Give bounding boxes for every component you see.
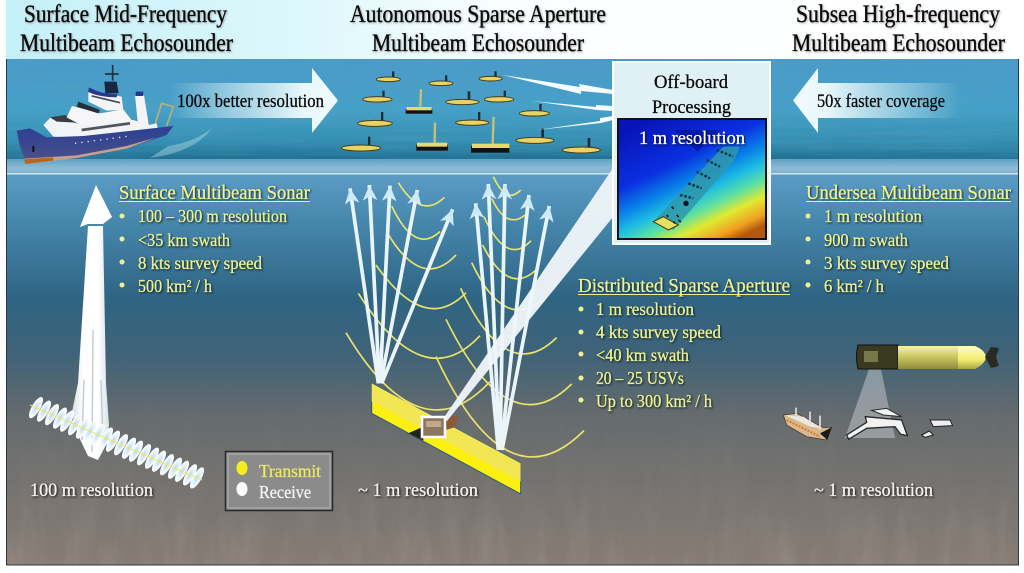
resolution label: 1 m resolution bbox=[639, 128, 745, 149]
legend bbox=[226, 452, 332, 510]
small ship inside swath bbox=[408, 416, 458, 441]
text block: surface multibeam sonar: 500 km² / h bbox=[138, 276, 212, 296]
icon: underwater vehicle bbox=[856, 345, 999, 369]
text block: surface multibeam sonar: 100 – 300 m resolution bbox=[138, 206, 287, 226]
sea surface bbox=[6, 59, 1019, 160]
text block: surface multibeam sonar: 8 kts survey speed bbox=[138, 253, 262, 273]
receive beam arrows bbox=[350, 184, 549, 450]
transmit key: Transmit bbox=[259, 461, 321, 481]
heading: Processing bbox=[652, 97, 731, 118]
title: autonomous echosounder bbox=[350, 1, 606, 57]
inset marker on ship bbox=[422, 417, 445, 437]
arrow: 100x better resolution bbox=[170, 68, 338, 133]
title: autonomous echosounder: Autonomous Sparse Aperture bbox=[350, 1, 606, 28]
sky band bbox=[6, 0, 1019, 59]
icon: debris bbox=[922, 420, 953, 437]
panel: off-board processing bbox=[613, 62, 770, 244]
link wedge to off-board processing bbox=[443, 168, 613, 421]
text block: distributed sparse aperture: 4 kts survey speed bbox=[596, 322, 721, 342]
text block: surface multibeam sonar: Surface Multibeam Sonar bbox=[119, 182, 310, 204]
seabed texture bbox=[8, 533, 948, 564]
text block: undersea multibeam sonar: 900 m swath bbox=[824, 230, 908, 250]
text block: distributed sparse aperture: Up to 300 km² / h bbox=[596, 391, 712, 411]
text block: surface multibeam sonar: <35 km swath bbox=[138, 230, 230, 250]
wreck bbox=[653, 130, 740, 230]
arrow: 100x better resolution: 100x better resolution bbox=[177, 91, 324, 112]
bathymetry image bbox=[618, 119, 766, 239]
title: autonomous echosounder: Multibeam Echosounder bbox=[372, 30, 585, 57]
text block: distributed sparse aperture: 1 m resolution bbox=[596, 299, 694, 319]
text block: distributed sparse aperture: 20 – 25 USVs bbox=[596, 368, 684, 388]
data links from vessels to processing bbox=[503, 75, 613, 130]
icon: sonar image of wreck bbox=[847, 408, 907, 439]
icon: survey ship bbox=[17, 65, 173, 164]
heading: Off-board bbox=[654, 72, 728, 93]
text block: undersea multibeam sonar bbox=[806, 182, 1011, 296]
arrow: 50x faster coverage bbox=[793, 68, 960, 133]
text block: surface multibeam sonar bbox=[119, 182, 310, 296]
text block: undersea multibeam sonar: Undersea Multibeam Sonar bbox=[806, 182, 1011, 204]
label: right 1 m resolution: ~ 1 m resolution bbox=[814, 481, 933, 501]
distributed aperture sonar diagram bbox=[346, 177, 584, 494]
ship wake bbox=[150, 128, 212, 158]
text block: distributed sparse aperture: Distributed Sparse Aperture bbox=[578, 275, 790, 297]
underwater water column bbox=[6, 174, 1019, 565]
text block: undersea multibeam sonar: 6 km² / h bbox=[824, 276, 884, 296]
receive fan beam bbox=[72, 226, 109, 460]
receive key: Receive bbox=[259, 482, 311, 502]
arrow: 50x faster coverage: 50x faster coverage bbox=[817, 91, 945, 112]
big receive arrow bbox=[80, 185, 112, 227]
fleet of uncrewed surface vessels bbox=[341, 71, 600, 153]
text block: distributed sparse aperture bbox=[578, 275, 790, 411]
text block: undersea multibeam sonar: 3 kts survey speed bbox=[824, 253, 949, 273]
title: surface echosounder bbox=[20, 1, 234, 57]
sonar footprints: surface multibeam bbox=[26, 185, 207, 490]
text block: distributed sparse aperture: <40 km swath bbox=[596, 345, 689, 365]
title: surface echosounder: Multibeam Echosounder bbox=[20, 30, 234, 57]
label: central 1 m resolution: ~ 1 m resolution bbox=[358, 481, 478, 501]
title: subsea echosounder bbox=[792, 1, 1006, 57]
wavefront arcs bbox=[346, 177, 584, 457]
label: 100 m resolution: 100 m resolution bbox=[30, 481, 153, 501]
heading bbox=[652, 72, 731, 118]
title: surface echosounder: Surface Mid-Frequency bbox=[24, 1, 227, 28]
footprint ellipses bbox=[26, 395, 207, 490]
transmit line bbox=[30, 405, 202, 480]
sonar cone from underwater vehicle bbox=[845, 369, 895, 438]
icon: shipwreck on seabed bbox=[783, 408, 832, 440]
waterline band bbox=[6, 159, 1019, 174]
yellow transmit swath bbox=[372, 383, 521, 494]
text block: undersea multibeam sonar: 1 m resolution bbox=[824, 206, 922, 226]
